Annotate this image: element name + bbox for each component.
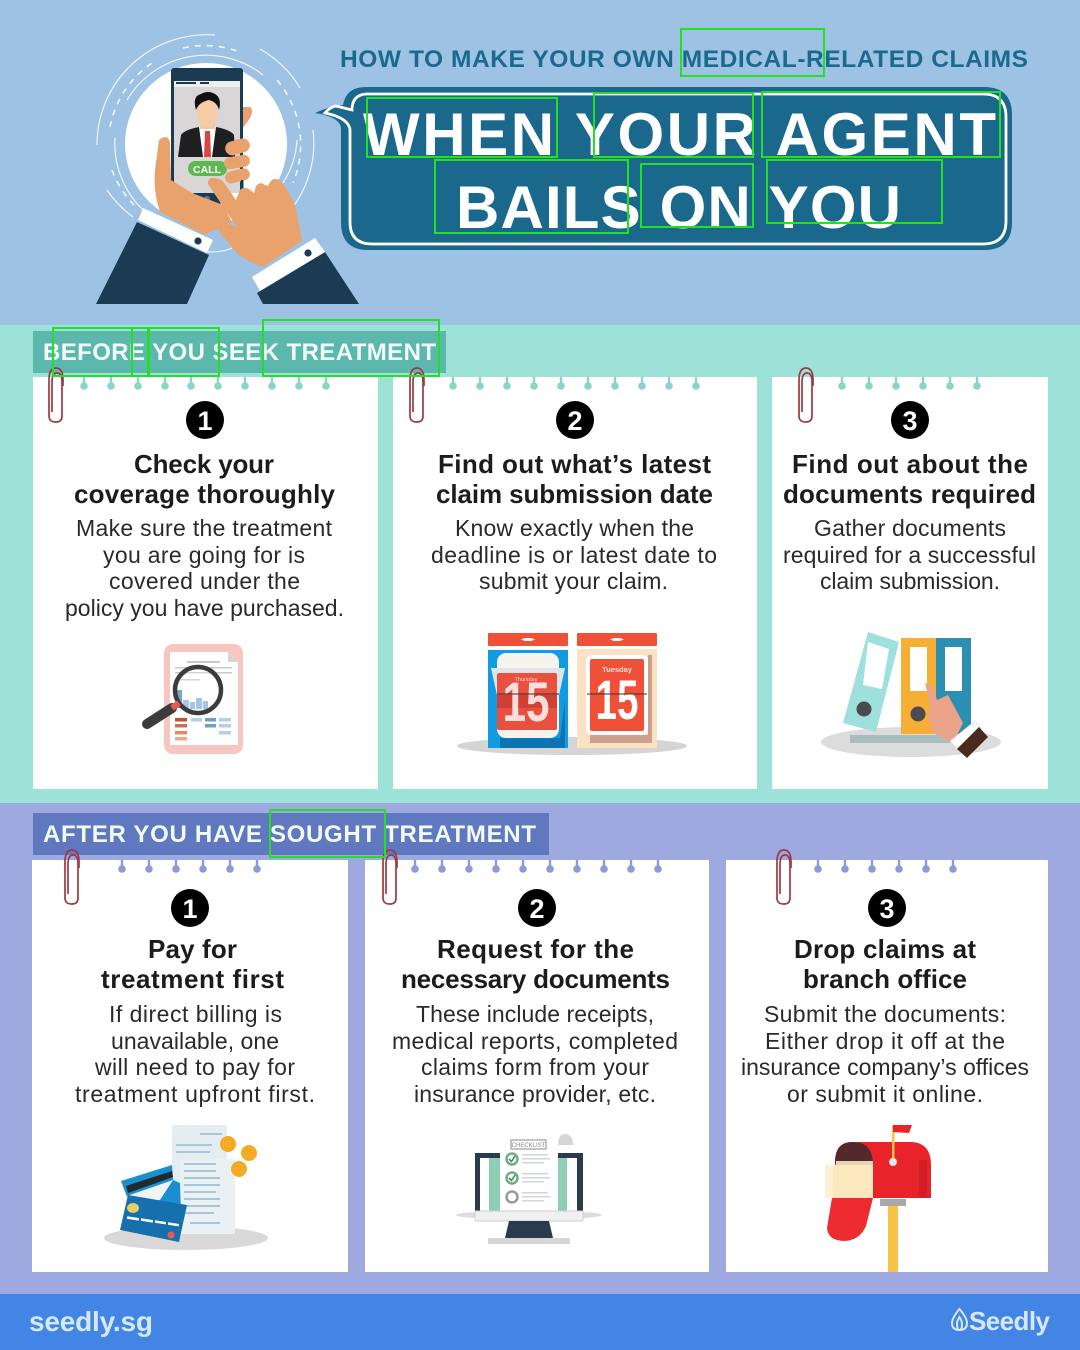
paperclip	[65, 850, 79, 904]
step description: medical reports, completed	[392, 1028, 678, 1054]
panel: before step 1	[33, 368, 378, 789]
number badge 1	[186, 401, 224, 439]
footer url: seedly.sg	[29, 1306, 153, 1337]
step heading: Find out about the	[792, 449, 1028, 479]
step heading: treatment first	[101, 964, 284, 994]
step description: policy you have purchased.	[65, 595, 344, 621]
step description	[75, 1001, 315, 1107]
step heading	[783, 449, 1036, 509]
step heading	[794, 934, 976, 994]
icon: credit cards and receipt	[104, 1125, 268, 1250]
punched holes	[449, 377, 700, 390]
icon: online checklist on monitor: CHECKLIST	[512, 1143, 546, 1149]
paperclip	[49, 368, 63, 422]
illustration: hands holding phone	[96, 35, 359, 304]
paperclip	[777, 850, 791, 904]
step description: Submit the documents:	[764, 1001, 1006, 1027]
step description: submit your claim.	[479, 568, 668, 594]
step description	[431, 515, 717, 594]
title text	[363, 101, 996, 241]
number badge 1: 1	[197, 406, 213, 436]
step description: deadline is or latest date to	[431, 542, 717, 568]
icon: flip calendars: 15	[502, 670, 550, 733]
section background: before	[0, 325, 1080, 803]
step description: Know exactly when the	[455, 515, 694, 541]
icon: flip calendars: Thursday	[515, 677, 538, 683]
step heading: necessary documents	[401, 964, 670, 994]
step description: treatment upfront first.	[75, 1081, 315, 1107]
step description: you are going for is	[103, 542, 305, 568]
panel: after step 2	[365, 850, 709, 1272]
title speech bubble	[315, 87, 1012, 250]
logo: Seedly: Seedly	[969, 1306, 1051, 1336]
gold coins	[220, 1136, 257, 1177]
step description	[741, 1001, 1029, 1107]
section label: before you seek treatment	[33, 331, 446, 373]
step description	[783, 515, 1036, 594]
punched holes	[118, 860, 261, 873]
step description: claims form from your	[421, 1054, 649, 1080]
step heading	[401, 934, 670, 994]
icon: flip calendars	[457, 633, 687, 755]
step description: These include receipts,	[416, 1001, 654, 1027]
section label: after you have sought treatment: AFTER YOU HAVE SOUGHT TREATMENT	[43, 821, 536, 848]
step heading	[74, 449, 336, 509]
step description: Either drop it off at the	[765, 1028, 1005, 1054]
icon: magnifier on document	[147, 644, 243, 754]
punched holes	[814, 860, 957, 873]
punched holes	[838, 377, 981, 390]
paperclip	[383, 850, 397, 904]
punched holes	[80, 377, 330, 390]
icon: binders	[821, 632, 1001, 758]
step heading: Pay for	[148, 934, 237, 964]
footer bar	[0, 1294, 1080, 1350]
subtitle: HOW TO MAKE YOUR OWN MEDICAL-RELATED CLAIMS	[340, 46, 1028, 73]
step description: Gather documents	[814, 515, 1006, 541]
step description	[392, 1001, 678, 1107]
title text: WHEN YOUR AGENT	[363, 101, 996, 168]
panel: after step 1	[32, 850, 348, 1272]
step description: Make sure the treatment	[76, 515, 333, 541]
step heading: claim submission date	[436, 479, 713, 509]
green detection box overlay from the reference	[53, 29, 1000, 857]
title text: BAILS ON YOU	[456, 174, 901, 241]
number badge 3: 3	[902, 406, 918, 436]
step heading: Check your	[134, 449, 274, 479]
number badge 2	[518, 889, 556, 927]
call button label: CALL	[193, 164, 222, 176]
number badge 3	[891, 401, 929, 439]
number badge 2: 2	[567, 406, 583, 436]
icon: online checklist on monitor	[456, 1134, 602, 1244]
punched holes	[411, 860, 662, 873]
icon: mailbox	[825, 1125, 931, 1272]
section label: before you seek treatment: BEFORE YOU SEEK TREATMENT	[43, 339, 436, 366]
icon: flip calendars: Tuesday	[602, 665, 633, 674]
number badge 2: 2	[529, 894, 545, 924]
panel: before step 3	[772, 368, 1048, 789]
paperclip	[410, 368, 424, 422]
step description	[65, 515, 344, 621]
number badge 3	[868, 889, 906, 927]
panel: after step 3	[726, 850, 1048, 1272]
step heading	[101, 934, 284, 994]
number badge 3: 3	[879, 894, 895, 924]
section background: after	[0, 803, 1080, 1294]
step heading: documents required	[783, 479, 1036, 509]
step description: or submit it online.	[787, 1081, 983, 1107]
step heading	[436, 449, 713, 509]
step description: covered under the	[109, 568, 300, 594]
step heading: Request for the	[437, 934, 634, 964]
step description: insurance provider, etc.	[414, 1081, 656, 1107]
step description: will need to pay for	[94, 1054, 295, 1080]
step heading: coverage thoroughly	[74, 479, 336, 509]
step description: unavailable, one	[111, 1028, 279, 1054]
header background	[0, 0, 1080, 325]
number badge 2	[556, 401, 594, 439]
step description: If direct billing is	[109, 1001, 282, 1027]
paperclip	[799, 368, 813, 422]
panel: before step 2	[393, 368, 757, 789]
step description: claim submission.	[820, 568, 1000, 594]
step description: required for a successful	[783, 542, 1036, 568]
step heading: Find out what’s latest	[438, 449, 711, 479]
step description: insurance company’s offices	[741, 1054, 1029, 1080]
step heading: Drop claims at	[794, 934, 976, 964]
step heading: branch office	[803, 964, 967, 994]
section label: after you have sought treatment	[33, 813, 549, 855]
icon: flip calendars: 15	[596, 668, 638, 731]
number badge 1: 1	[182, 894, 198, 924]
number badge 1	[171, 889, 209, 927]
